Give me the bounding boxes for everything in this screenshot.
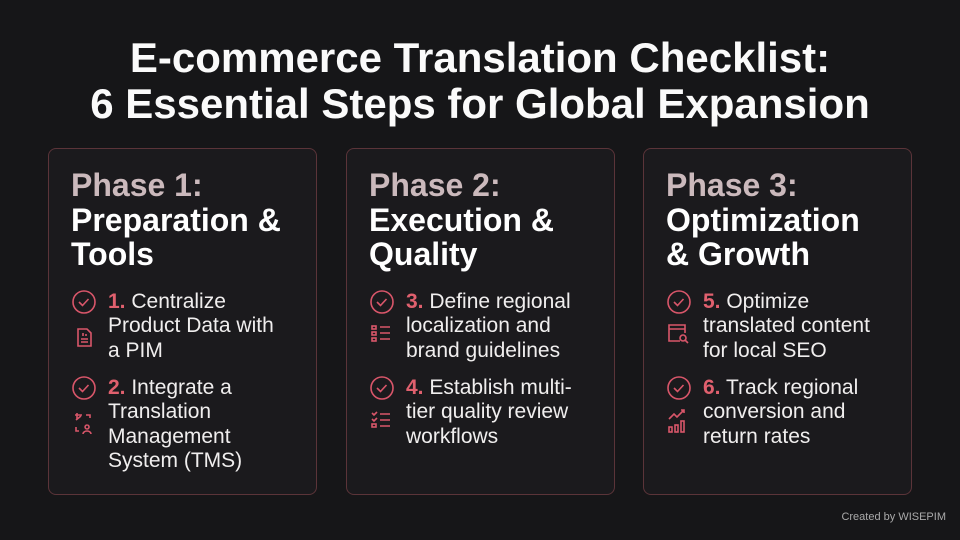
item 5: 5. Optimize translated content for local SEO xyxy=(703,290,870,362)
heading: phase 3: Optimization xyxy=(666,202,860,238)
heading: phase 1: Phase 1: xyxy=(71,167,203,203)
title: 6 Essential Steps for Global Expansion xyxy=(90,80,870,127)
title: E-commerce Translation Checklist: xyxy=(130,34,830,81)
footer credit: Created by WISEPIM xyxy=(841,511,946,523)
heading: phase 3: Phase 3: xyxy=(666,167,798,203)
heading: phase 1 xyxy=(71,167,281,272)
heading: phase 2 xyxy=(369,167,554,272)
heading: phase 3: & Growth xyxy=(666,236,810,272)
item 3: 3. Define regional localization and brand guidelines xyxy=(406,290,571,362)
heading: phase 1: Preparation & xyxy=(71,202,281,238)
panel: phase 2 xyxy=(346,148,615,495)
title xyxy=(90,34,870,127)
panel: phase 3 xyxy=(643,148,912,495)
item 1: 1. Centralize Product Data with a PIM xyxy=(108,290,274,362)
icons: phase 3 xyxy=(667,290,691,433)
heading: phase 1: Tools xyxy=(71,236,154,272)
icons: phase 2 xyxy=(370,290,394,428)
panel: phase 1 xyxy=(48,148,317,495)
icons: phase 1 xyxy=(72,290,96,434)
item 4: 4. Establish multi-tier quality review workflows xyxy=(406,376,572,448)
heading: phase 3 xyxy=(666,167,860,272)
heading: phase 2: Quality xyxy=(369,236,477,272)
heading: phase 2: Phase 2: xyxy=(369,167,501,203)
item 2: 2. Integrate a Translation Management System (TMS) xyxy=(108,376,242,472)
heading: phase 2: Execution & xyxy=(369,202,554,238)
item 6: 6. Track regional conversion and return rates xyxy=(703,376,858,448)
